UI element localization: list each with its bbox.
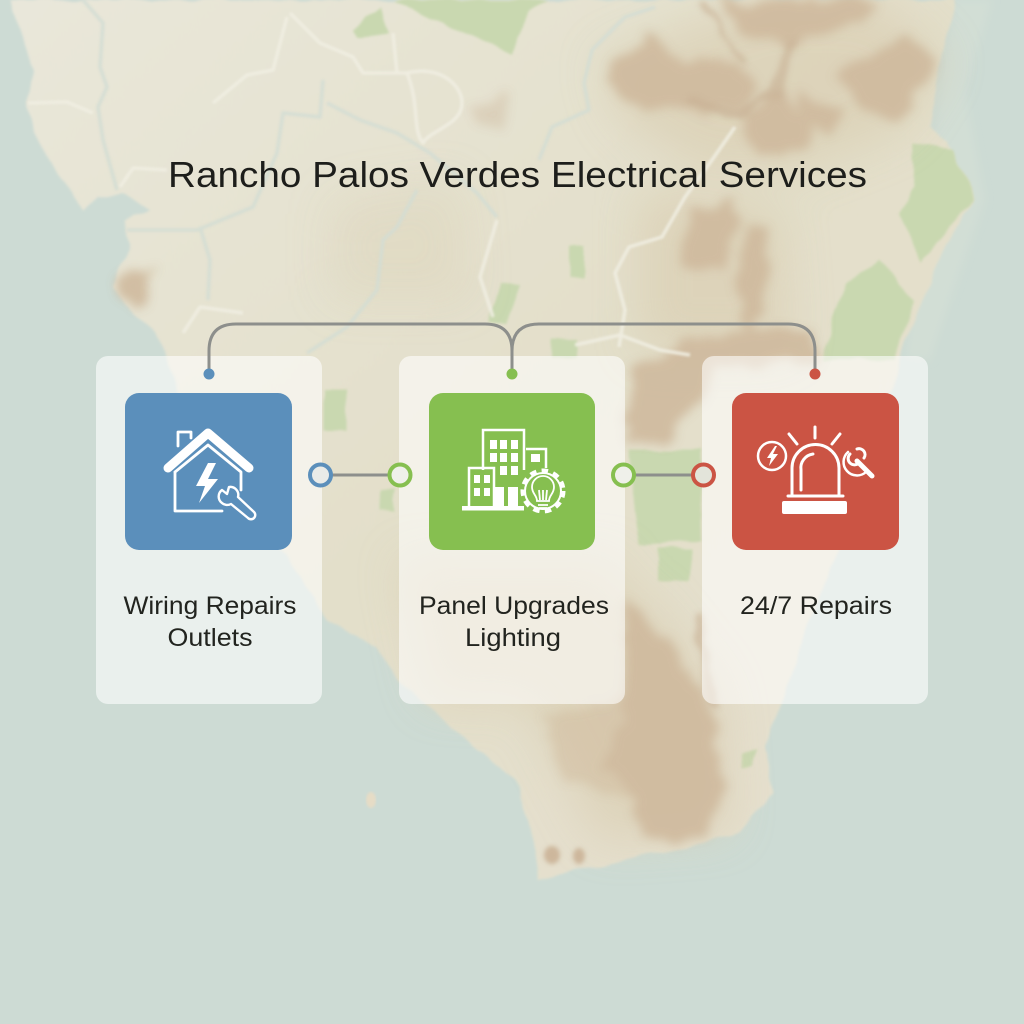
label: 24/7 repairs: 24/7 Repairs bbox=[740, 592, 892, 620]
top connector lines bbox=[209, 324, 815, 372]
label: wiring repairs, outlets: Wiring Repairs bbox=[124, 592, 296, 620]
broad terrain tone bbox=[330, 0, 945, 840]
connector: blue to green bbox=[310, 464, 410, 486]
label: wiring repairs, outlets: Outlets bbox=[168, 624, 252, 652]
label: panel upgrades, lighting: Lighting bbox=[465, 624, 561, 652]
mountain ridges bbox=[120, 0, 942, 840]
label: panel upgrades, lighting: Panel Upgrades bbox=[419, 592, 609, 620]
icon tile: alarm beacon with bolt and wrench bbox=[732, 393, 899, 550]
icon tile: house with lightning and wrench bbox=[125, 393, 292, 550]
panel: 24/7 repairs bbox=[702, 356, 928, 704]
rivers bbox=[83, 0, 655, 353]
panel: wiring repairs bbox=[96, 356, 322, 704]
dot: blue bbox=[204, 368, 214, 380]
icon tile: buildings with gear and bulb bbox=[429, 393, 595, 550]
connector: green to red bbox=[613, 464, 714, 486]
dot: red bbox=[810, 368, 820, 380]
island bbox=[366, 792, 376, 808]
small southern hills bbox=[544, 846, 585, 864]
title: Rancho Palos Verdes Electrical Services bbox=[168, 154, 867, 195]
road network bbox=[28, 13, 735, 355]
green parks bbox=[324, 0, 975, 768]
pale coastal strip bbox=[905, 0, 992, 360]
dot: green bbox=[506, 368, 518, 380]
panel: panel upgrades bbox=[399, 356, 625, 704]
